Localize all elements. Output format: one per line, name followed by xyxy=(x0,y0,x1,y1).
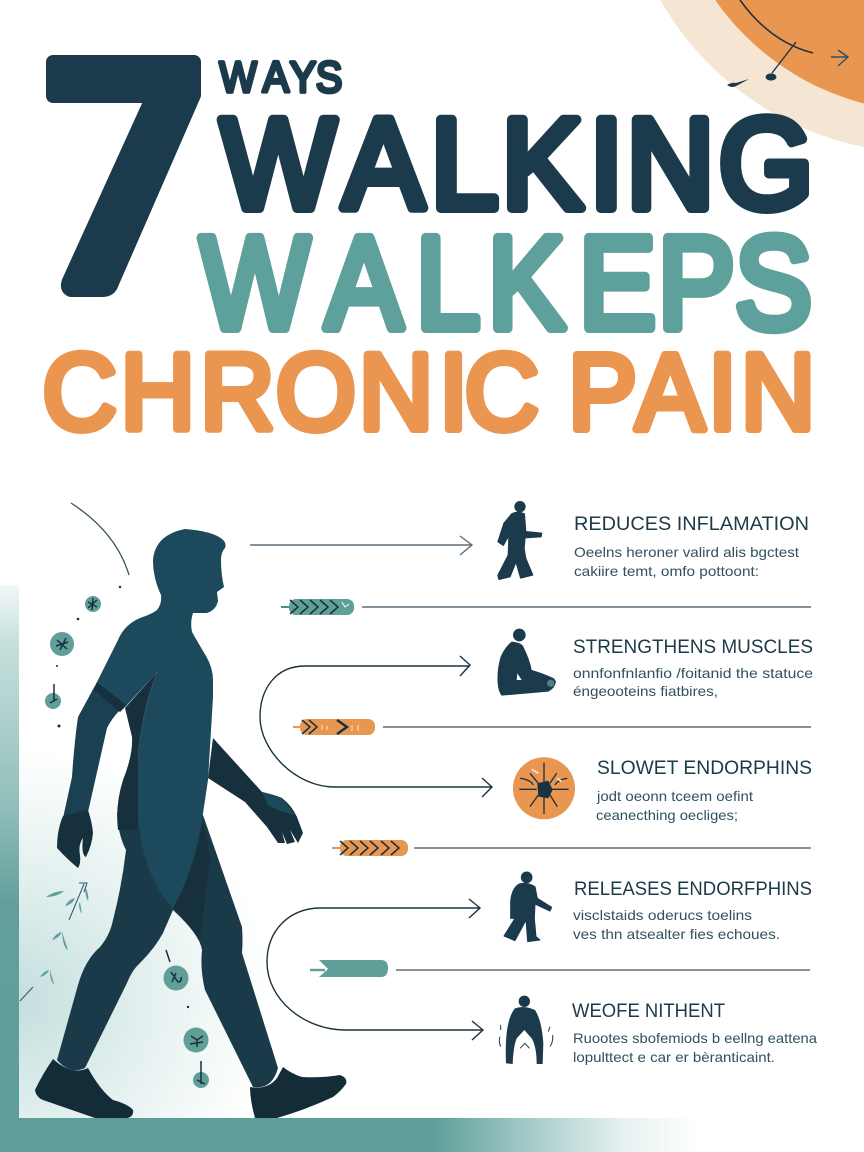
divider pill 1 xyxy=(281,599,811,615)
front leg xyxy=(170,815,278,1087)
sun decoration top right xyxy=(620,0,864,153)
icon: front-facing person xyxy=(480,996,553,1064)
item 1: reduces inflammation xyxy=(498,502,809,579)
item 2: strengthens muscles: onnfonfnlanfio /foitanid the statuce xyxy=(573,665,813,681)
item 5: weofe nithent: WEOFE NITHENT xyxy=(572,1000,725,1022)
curved arrows 3 xyxy=(267,899,483,1040)
item 3: slowet endorphins: jodt oeonn tceem oefint xyxy=(596,788,753,804)
item 4: releases endorphins: ves thn atsealter fies echoues. xyxy=(573,926,780,942)
torso and head xyxy=(97,529,226,908)
divider pill 3 xyxy=(332,840,811,856)
item 5: weofe nithent: Ruootes sbofemiods b eellng eattena xyxy=(573,1030,817,1046)
particles lower xyxy=(164,950,209,1088)
arrow 1 xyxy=(250,536,472,555)
title: CHRONIC PAIN: CHRONIC PAIN xyxy=(43,333,815,453)
item 2: strengthens muscles: éngeooteins fiatbires, xyxy=(573,683,718,699)
item 3: slowet endorphins: ceanecthing oecliges; xyxy=(596,807,738,823)
item 1: reduces inflammation: Oeelns heroner valird alis bgctest xyxy=(574,544,799,560)
item 2: strengthens muscles: STRENGTHENS MUSCLES xyxy=(573,636,813,658)
near hand xyxy=(57,810,93,868)
icon: walking person xyxy=(498,502,542,579)
item 1: reduces inflammation: REDUCES INFLAMATION xyxy=(574,513,809,535)
hip shadow xyxy=(117,672,157,830)
item 5: weofe nithent xyxy=(480,996,817,1065)
item 3: slowet endorphins: SLOWET ENDORPHINS xyxy=(597,757,812,779)
background: pale wash, left strip, bottom strip xyxy=(0,585,864,1152)
item 1: reduces inflammation: cakiire temt, omfo pottoont: xyxy=(574,563,759,579)
item 3: slowet endorphins xyxy=(513,757,812,823)
title: WALKEPS: WALKEPS xyxy=(200,210,812,357)
near arm xyxy=(63,682,127,818)
item 2: strengthens muscles xyxy=(497,629,813,699)
title: big numeral 7 xyxy=(53,62,194,290)
item 4: releases endorphins: visclstaids oderucs toelins xyxy=(573,907,752,923)
item 4: releases endorphins: RELEASES ENDORFPHINS xyxy=(574,878,812,900)
divider pill 4 xyxy=(310,960,810,977)
shoes xyxy=(35,1059,133,1118)
item 4: releases endorphins xyxy=(504,872,812,942)
particles upper left xyxy=(45,503,129,728)
leaves lower left xyxy=(20,883,88,1001)
walking figure silhouette xyxy=(35,529,346,1118)
title: WAYS: WAYS xyxy=(219,52,342,101)
item 5: weofe nithent: lopulttect e car er bèranticaint. xyxy=(573,1049,775,1065)
far arm xyxy=(208,738,303,844)
title: WALKING: WALKING xyxy=(221,93,813,236)
divider pill 2 xyxy=(293,719,811,735)
icon: striding person xyxy=(504,872,552,942)
sleeve hem shadow xyxy=(94,682,127,712)
icon: nerve burst xyxy=(513,757,575,819)
back leg xyxy=(57,810,173,1070)
icon: seated person xyxy=(497,629,556,696)
curved arrows 2 xyxy=(260,656,492,797)
